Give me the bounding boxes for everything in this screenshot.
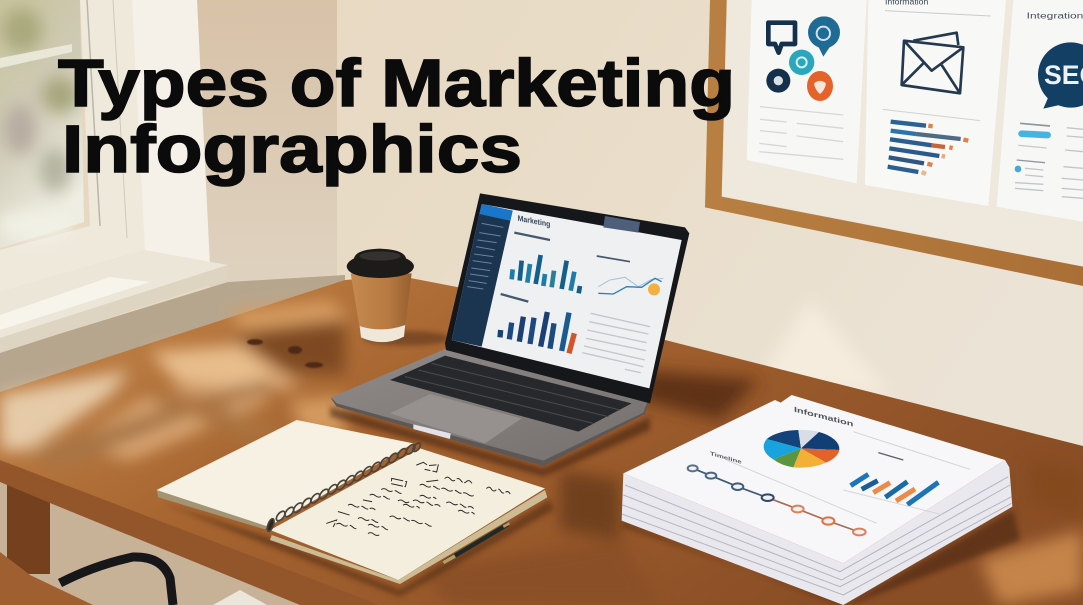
coffee cup and laptop xyxy=(330,193,689,477)
desk leg xyxy=(7,482,50,574)
laptop shadow xyxy=(330,407,650,477)
left wall section xyxy=(197,0,890,395)
title: Infographics xyxy=(62,112,522,187)
title xyxy=(58,46,735,187)
top sheet xyxy=(623,395,1005,563)
laptop notch xyxy=(413,424,451,439)
spiral binding xyxy=(266,442,422,532)
cup shadow xyxy=(363,331,450,346)
timeline xyxy=(688,465,866,535)
dashboard sidebar xyxy=(452,204,513,347)
notebook xyxy=(157,420,553,597)
dashboard bottom bar chart xyxy=(500,294,574,353)
stack sides xyxy=(622,460,1012,605)
dashboard line chart xyxy=(597,256,663,295)
baseboard xyxy=(213,590,267,605)
chair xyxy=(0,552,173,605)
right page xyxy=(270,490,547,584)
timeline heading: Timeline xyxy=(710,451,742,466)
wood knots xyxy=(247,339,323,368)
wall art frame with posters xyxy=(705,0,1083,286)
trackpad xyxy=(390,394,522,443)
keyboard xyxy=(390,356,632,432)
poster: social icons xyxy=(747,0,867,183)
sunlight and shadow on desk xyxy=(0,300,1083,605)
poster: SEO: Integration xyxy=(1027,10,1083,20)
paper stack xyxy=(622,395,1020,605)
pie chart xyxy=(764,430,839,468)
window xyxy=(0,0,210,292)
title: Types of Marketing xyxy=(58,46,735,121)
dashboard heading: Marketing xyxy=(518,214,550,229)
lower wall under sill xyxy=(0,275,345,396)
small bar chart xyxy=(851,453,938,505)
laptop screen xyxy=(452,204,682,388)
window frame xyxy=(0,0,145,292)
notebook shadow xyxy=(163,500,553,597)
dashboard table xyxy=(582,313,650,373)
poster: SEO xyxy=(997,0,1083,222)
desk front edge xyxy=(0,460,380,605)
bezel reflection xyxy=(603,216,640,233)
coffee cup xyxy=(347,249,414,342)
dashboard top bar chart xyxy=(512,233,580,293)
under-desk wall xyxy=(0,470,400,605)
handwriting scribbles xyxy=(327,462,510,535)
frame xyxy=(705,0,1083,286)
pen xyxy=(443,523,509,563)
laptop base xyxy=(331,348,648,466)
window pane xyxy=(0,0,84,248)
window sill xyxy=(0,250,228,353)
stack shadow xyxy=(623,510,1020,605)
sheet heading: Information xyxy=(794,405,854,429)
window reveal xyxy=(130,0,210,266)
mat board xyxy=(722,0,1083,266)
left page xyxy=(157,490,270,529)
poster: email xyxy=(865,0,1006,206)
laptop lid xyxy=(445,193,689,403)
desk xyxy=(0,276,1083,605)
